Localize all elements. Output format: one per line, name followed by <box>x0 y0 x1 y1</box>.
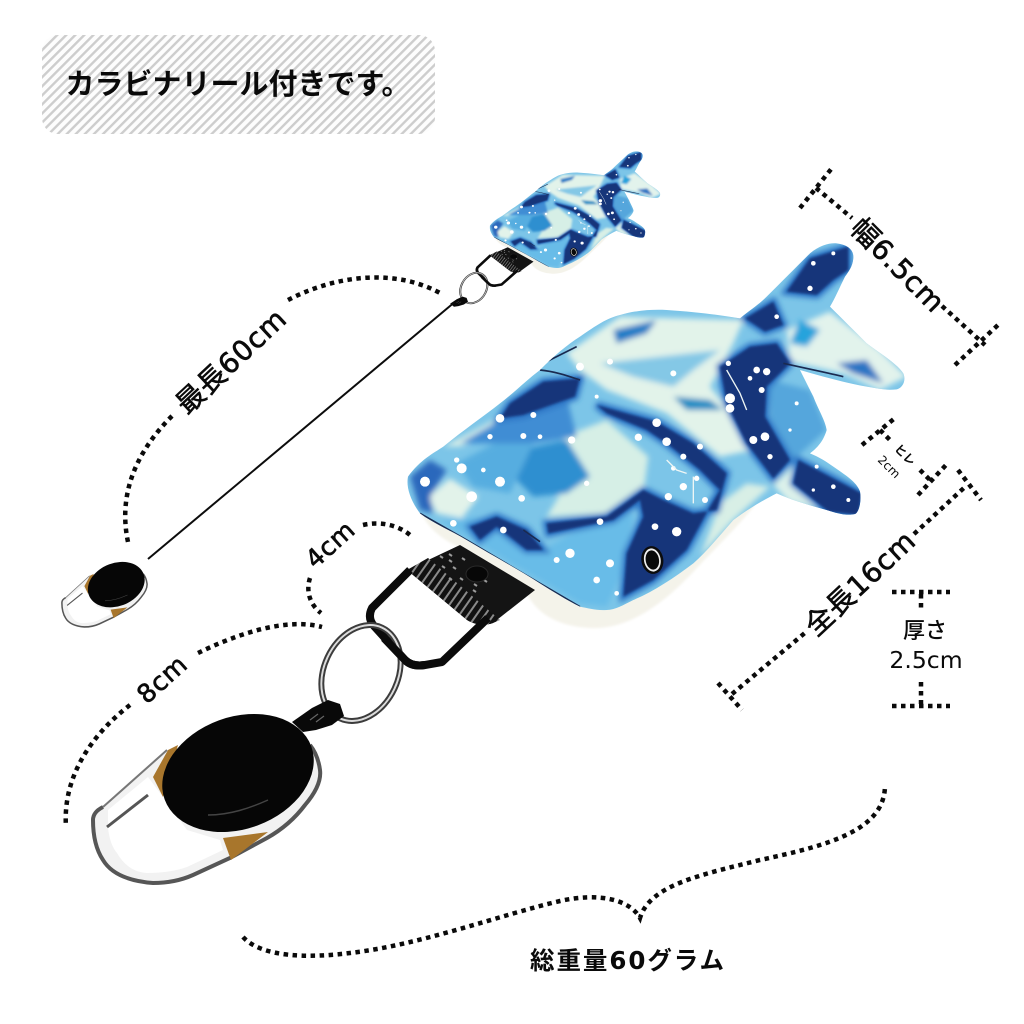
carabiner hole <box>108 777 223 873</box>
dimension: total length 16cm <box>718 470 981 710</box>
mint patches <box>567 317 753 457</box>
white spots <box>420 251 850 596</box>
whale body <box>400 230 920 623</box>
eye <box>639 544 666 576</box>
small reel <box>62 554 151 627</box>
dimension: fin 2cm: 2cm <box>875 453 903 481</box>
total weight brace: 総重量60グラム <box>530 946 724 975</box>
panel: title banner <box>42 35 435 134</box>
dimension: maximum length: 最長60cm <box>169 302 293 421</box>
dimension: total length 16cm: 全長16cm <box>798 524 922 643</box>
bright blue patches <box>507 440 590 497</box>
dimension: fin 2cm <box>862 418 946 495</box>
icon: large reel carabiner <box>93 694 330 883</box>
split ring <box>306 612 416 734</box>
dimension: 4cm loop: 4cm <box>300 515 361 574</box>
swivel <box>292 700 344 732</box>
lever line <box>107 795 148 827</box>
towel lining <box>420 500 755 628</box>
total weight brace <box>243 785 885 975</box>
dark seam <box>420 347 843 607</box>
dimension: width 6.5cm <box>800 168 998 365</box>
carabiner frame <box>93 745 320 883</box>
dimension: width 6.5cm: 幅6.5cm <box>844 211 952 319</box>
title: カラビナリール付きです。 <box>65 67 411 101</box>
D ring <box>370 570 488 665</box>
blue halo around navy <box>470 247 862 597</box>
retractable cord <box>148 301 456 559</box>
reel disc <box>146 694 330 852</box>
dimension: thickness 2.5cm: 厚さ <box>903 619 947 644</box>
dimension: fin 2cm: ヒレ <box>892 442 918 468</box>
metal outline <box>93 745 320 883</box>
dimension: thickness 2.5cm: 2.5cm <box>889 646 963 674</box>
illustration: whale pouch with ring and loop <box>292 230 920 734</box>
dimension: 8cm reel: 8cm <box>131 649 194 710</box>
dimension: thickness 2.5cm <box>889 592 963 706</box>
small whale pouch at cord end <box>450 147 666 307</box>
navy bands <box>470 247 862 597</box>
gold metal <box>153 745 178 797</box>
dimension: 4cm loop <box>300 515 410 613</box>
dimension: maximum length <box>125 277 440 542</box>
fabric tab with snap <box>407 545 535 625</box>
D ring overlap <box>384 638 425 665</box>
dimension: 8cm reel <box>66 624 322 827</box>
upper bar <box>103 750 167 807</box>
